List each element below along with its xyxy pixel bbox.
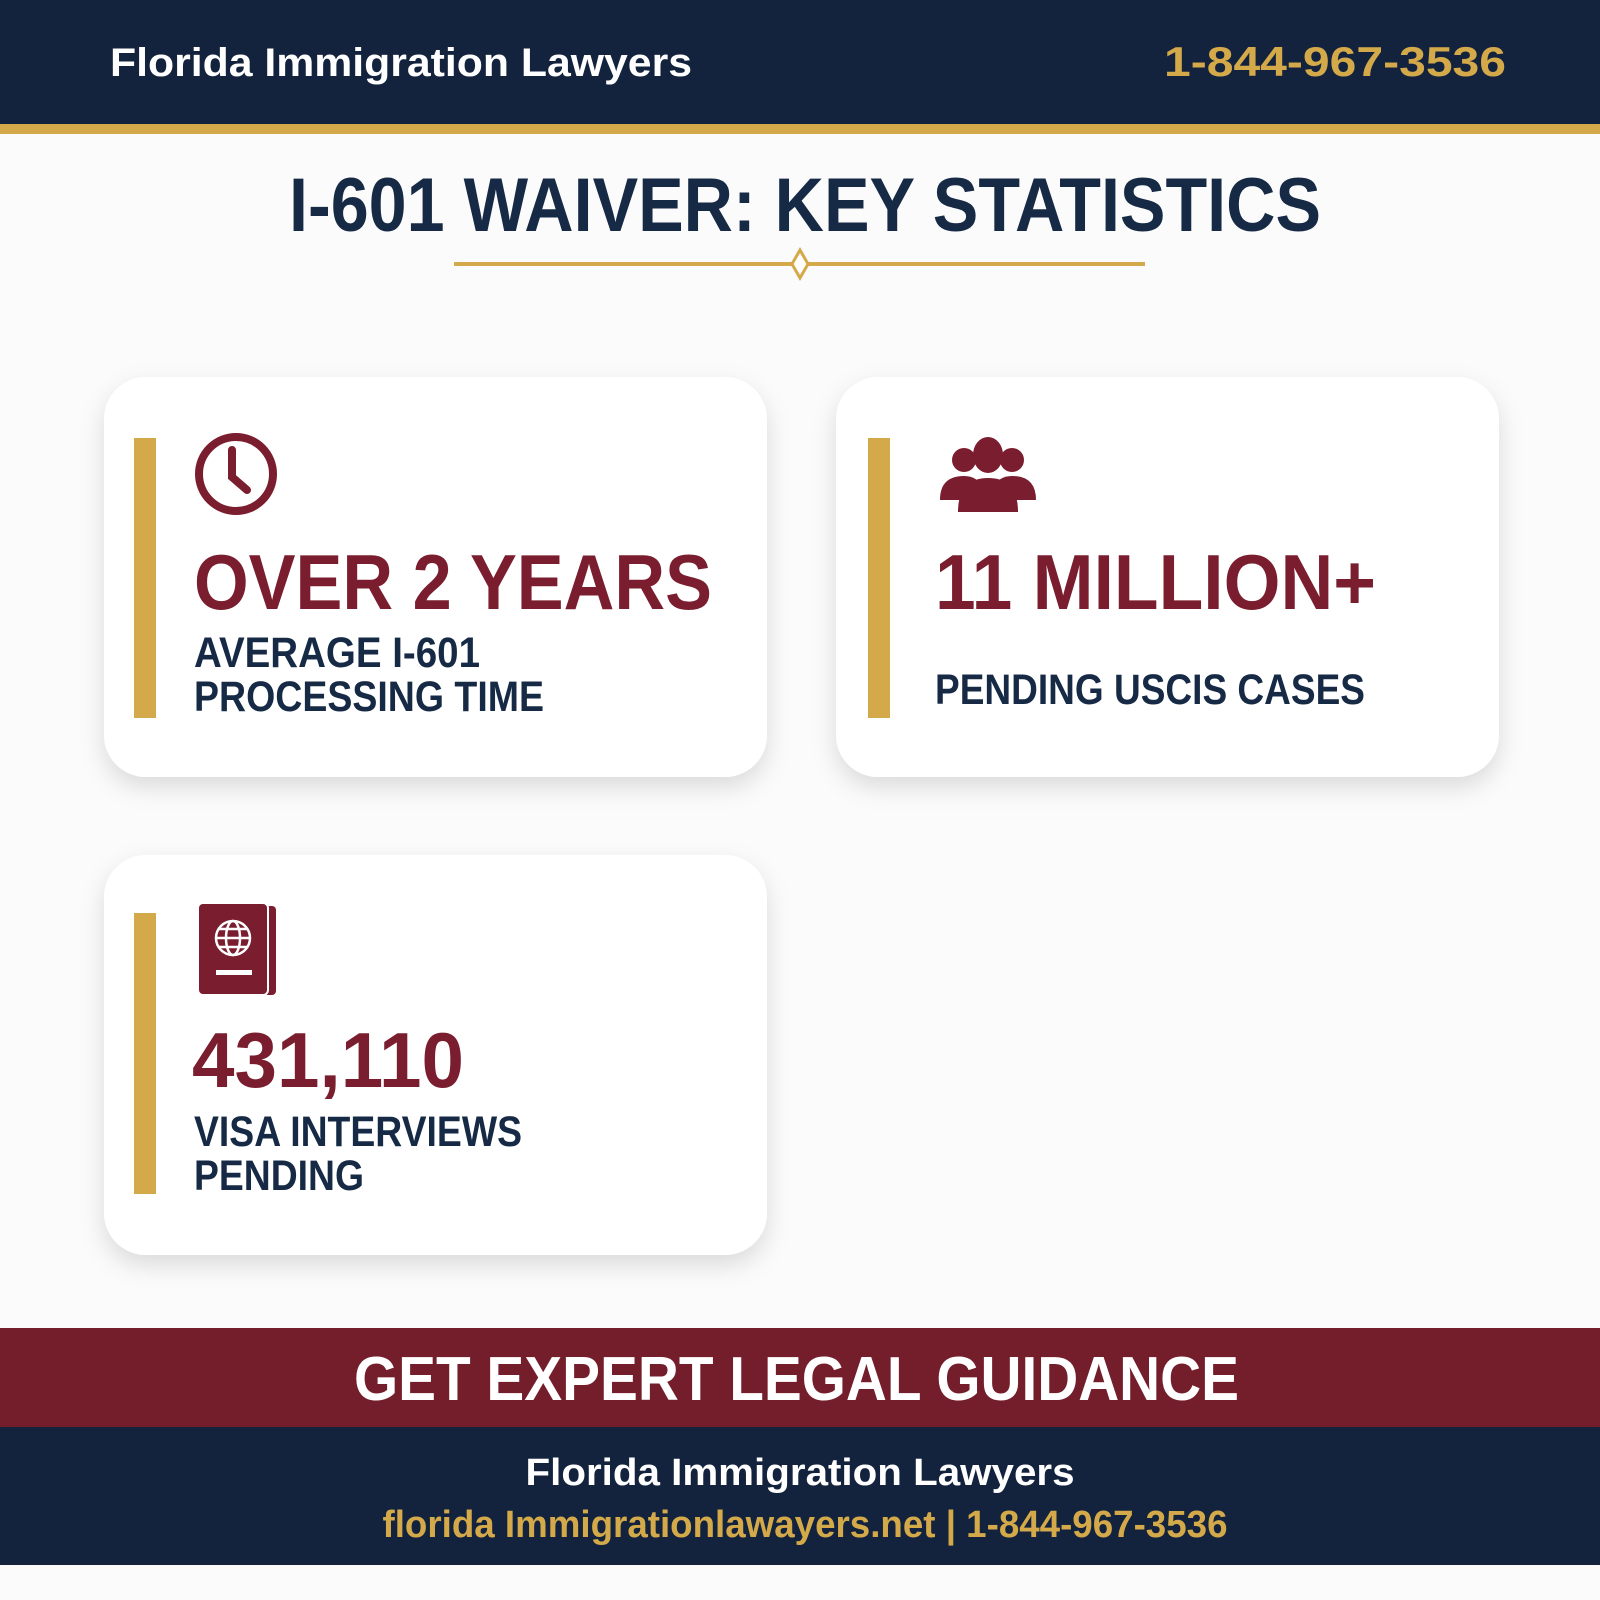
footer contact: florida Immigrationlawayers.net | 1-844-967-3536 bbox=[382, 1504, 1228, 1546]
footer firm name: Florida Immigration Lawyers bbox=[526, 1452, 1074, 1494]
call to action banner bbox=[0, 1328, 1600, 1427]
stat: 431,110: 431,110 bbox=[192, 1016, 464, 1104]
label: pending uscis cases: PENDING USCIS CASES bbox=[935, 666, 1365, 714]
header bar bbox=[0, 0, 1600, 134]
stat: over 2 years: OVER 2 YEARS bbox=[194, 538, 712, 626]
panel: pending cases bbox=[836, 377, 1499, 777]
icon: passport bbox=[198, 903, 276, 995]
label: processing time bbox=[194, 629, 544, 721]
label: visa interviews pending: VISA INTERVIEWS bbox=[194, 1108, 522, 1156]
icon: people bbox=[940, 437, 1036, 512]
title: I-601 WAIVER: KEY STATISTICS bbox=[289, 163, 1321, 248]
header phone: 1-844-967-3536 bbox=[1164, 38, 1506, 85]
stat: 11 million: 11 MILLION+ bbox=[935, 538, 1376, 626]
panel: processing time bbox=[104, 377, 767, 777]
icon: clock bbox=[199, 437, 273, 511]
label: processing time: PROCESSING TIME bbox=[194, 673, 544, 721]
label: visa interviews pending bbox=[194, 1108, 522, 1200]
label: visa interviews pending: PENDING bbox=[194, 1152, 364, 1200]
title divider bbox=[454, 250, 1145, 278]
label: processing time: AVERAGE I-601 bbox=[194, 629, 480, 677]
panel: visa interviews bbox=[104, 855, 767, 1255]
call to action banner: GET EXPERT LEGAL GUIDANCE bbox=[354, 1345, 1239, 1414]
footer bbox=[0, 1427, 1600, 1565]
header firm name: Florida Immigration Lawyers bbox=[110, 41, 692, 85]
